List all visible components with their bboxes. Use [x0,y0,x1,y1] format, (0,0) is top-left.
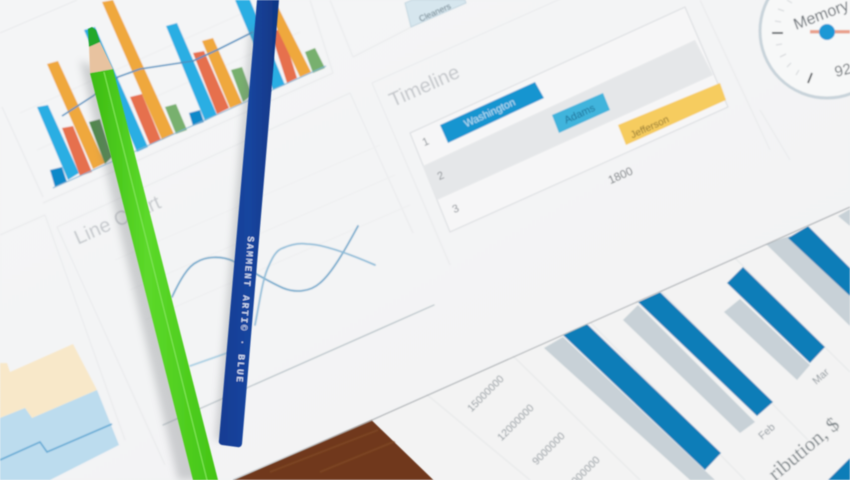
bar: Jefferson [618,83,726,145]
lower sheet: contribution bar chart [372,207,850,480]
axis labels: 15000000 [465,373,507,415]
axis line [163,305,434,425]
axis labels: Feb [756,421,778,442]
year label: 1800 [607,166,635,187]
chart baseline [53,66,326,188]
bar: Jefferson: Jefferson [629,114,671,141]
heading: timeline: Timeline [386,61,463,112]
table: timeline [410,7,728,232]
bar: Adams [552,93,610,133]
chart: stacked area [0,344,119,480]
bar group: April [765,209,850,326]
gauge: memory [760,0,850,98]
gauge hub [819,24,835,40]
partial bar bottom right [828,458,850,480]
wooden table corner [233,420,434,480]
bar group: January [544,324,721,480]
bar: Washington [440,82,544,143]
chart: multi-colour bars [37,0,326,188]
row numbers: 3 [451,203,461,216]
row numbers: 2 [436,170,446,183]
pencil shadows [80,30,258,480]
gauge needle [810,30,850,34]
gauge major ticks [772,33,812,83]
pencil imprint: SAMMENT ARTI© · BLUE [233,236,256,384]
row numbers: 1 [421,136,431,149]
bar group: February [623,292,773,433]
pencil: blue [219,0,279,447]
pencil: green [88,27,218,480]
bar: Washington: Washington [462,96,517,130]
button: Cleaners [405,0,466,27]
heading: line chart: Line Chart [71,192,165,249]
axis labels [465,366,832,480]
bar: Adams: Adams [562,102,597,127]
grid lines [425,258,850,480]
chart: line curves [163,226,434,425]
axis labels: 12000000 [495,402,537,444]
trend line [62,32,253,116]
gauge minor ticks [775,0,799,75]
row numbers [421,136,461,216]
axis labels: Mar [810,366,832,387]
axis labels: 9000000 [530,430,568,468]
button: Cleaners: Cleaners [417,1,452,24]
bar group: March [724,267,825,380]
